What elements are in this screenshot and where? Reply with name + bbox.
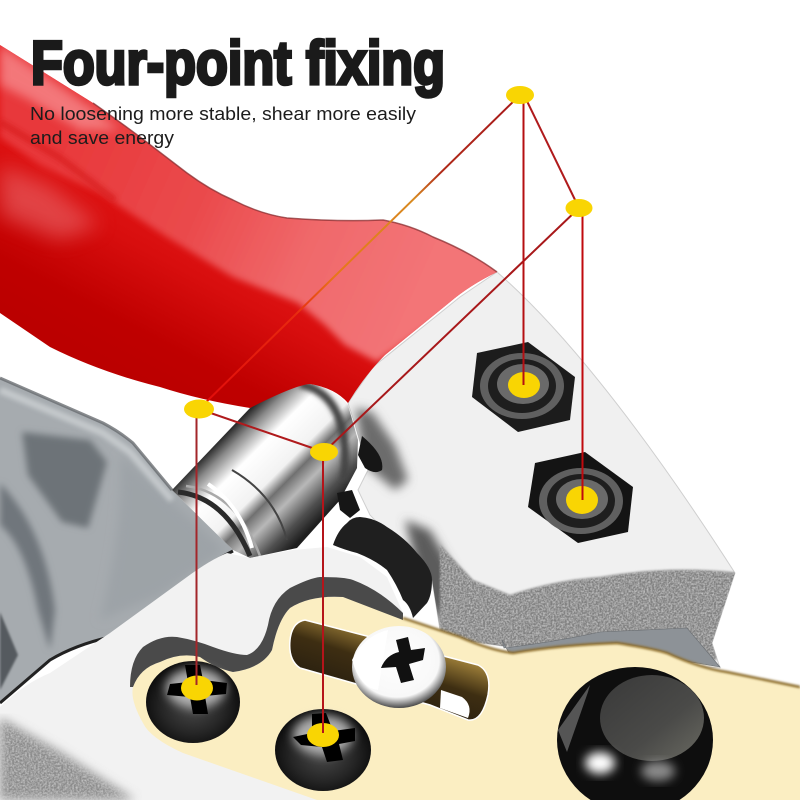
steel blade sliver [502, 628, 720, 667]
silver lower jaw body [0, 547, 403, 800]
chrome pivot cylinder [172, 384, 358, 558]
subtitle: and save energy [30, 127, 175, 148]
black round knob [557, 667, 713, 800]
yellow marker on nut [508, 372, 540, 398]
title: Four-point fixing [31, 29, 445, 97]
yellow marker on centre screw [307, 723, 339, 747]
yellow node centre [310, 443, 338, 461]
connector lines [196, 95, 582, 733]
subtitle [30, 103, 417, 148]
hex nut upper [472, 342, 575, 432]
adjustment slot [290, 620, 489, 720]
screw centre [275, 709, 371, 791]
textured shaded band of upper jaw [440, 545, 740, 668]
yellow marker on left screw [181, 676, 213, 700]
yellow node top [506, 86, 534, 104]
screw left [146, 661, 240, 743]
silver upper jaw body [348, 272, 740, 668]
red handle [0, 30, 510, 408]
yellow marker on nut [566, 486, 598, 514]
yellow node right [566, 199, 592, 217]
gold plate [130, 577, 800, 800]
black spring [333, 436, 432, 618]
plate edge shadow [130, 577, 403, 687]
subtitle: No loosening more stable, shear more easily [30, 103, 417, 124]
hex nut lower [528, 452, 633, 543]
yellow node left [184, 400, 214, 418]
grey lower handle [0, 378, 233, 703]
white chrome screw [352, 626, 446, 708]
